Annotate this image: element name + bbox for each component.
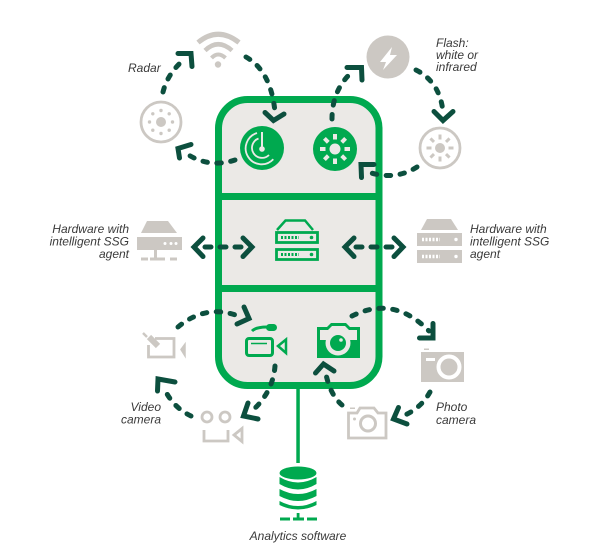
- label: right hardware: Hardware with: [470, 222, 547, 236]
- arrow: sun to flash: [332, 68, 362, 119]
- label: flash: Flash:: [436, 36, 469, 50]
- icon: left server: [137, 221, 182, 260]
- arrow: gray camera to green video: [178, 307, 249, 327]
- icon: gray photo camera solid: [421, 348, 464, 382]
- icon: gray video camera reels: [202, 412, 242, 442]
- arrow: green video to reels: [244, 366, 275, 419]
- central device panel: [218, 100, 379, 386]
- arrow: emitter to wifi: [163, 54, 192, 92]
- label: right hardware: agent: [470, 247, 501, 261]
- label: photo camera: camera: [436, 413, 476, 427]
- arrow: outline camera to green photo: [316, 364, 342, 405]
- icon: radar: [240, 126, 284, 170]
- arrow: green photo to solid camera: [352, 308, 433, 338]
- icon: flash sun: [313, 127, 357, 171]
- label: analytics software: Analytics software: [249, 529, 347, 543]
- arrow: wifi to radar: [246, 57, 284, 120]
- label: flash: infrared: [436, 60, 477, 74]
- label: video camera: Video: [131, 400, 161, 414]
- arrow: radar to emitter: [178, 144, 235, 163]
- arrow: flash to emitter: [416, 70, 453, 120]
- label: video camera: camera: [121, 412, 161, 426]
- icon: right server: [417, 219, 462, 263]
- icon: flash emitter: [420, 128, 460, 168]
- icon: gray video camera side: [143, 333, 185, 357]
- arrow: emitter to sun: [361, 164, 417, 178]
- icon: radar emitter: [141, 102, 181, 142]
- label: left hardware: Hardware with: [52, 222, 129, 236]
- arrow: reels to side camera: [158, 379, 191, 416]
- icon: flash bolt: [366, 36, 410, 78]
- label: right hardware: intelligent SSG: [470, 234, 549, 248]
- icon: gray photo camera outline: [348, 408, 386, 438]
- label: left hardware: intelligent SSG: [50, 234, 129, 248]
- label: flash: white or: [436, 48, 479, 62]
- icon: database: [280, 466, 317, 520]
- icon: wifi: [198, 34, 239, 68]
- icon: central server: [276, 220, 318, 260]
- label: photo camera: Photo: [436, 400, 467, 414]
- arrow: right hardware double arrow: [345, 238, 403, 256]
- arrow: left hardware double arrow: [194, 238, 252, 256]
- arrow: solid camera to outline camera: [394, 392, 430, 424]
- icon: green video camera: [246, 324, 286, 356]
- icon: green photo camera: [317, 323, 360, 358]
- label: left hardware: agent: [99, 247, 130, 261]
- label: radar: Radar: [128, 61, 162, 75]
- connector line to analytics: [296, 386, 300, 463]
